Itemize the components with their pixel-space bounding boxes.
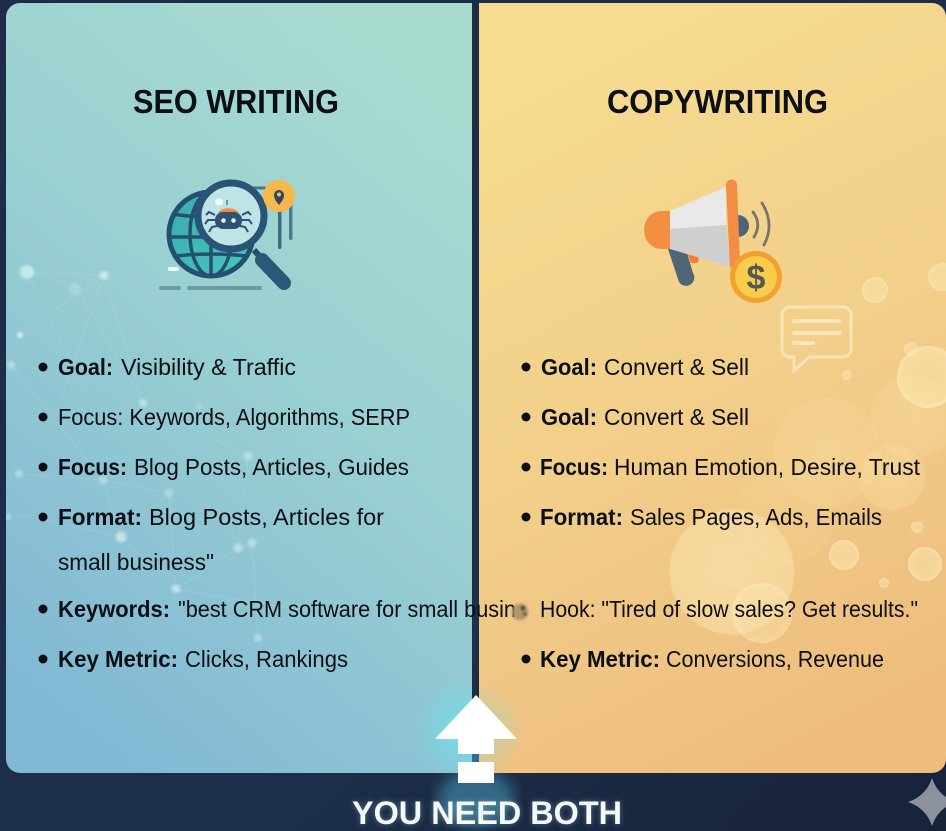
panel: SEO writing bbox=[5, 3, 472, 773]
list: copywriting points bbox=[522, 354, 920, 672]
list: SEO writing points bbox=[38, 354, 516, 672]
list: copywriting points: Goal: bbox=[541, 354, 597, 380]
list: SEO writing points: Format: bbox=[58, 504, 142, 530]
smudge artifact over text bbox=[512, 604, 528, 620]
icon: megaphone with dollar coin bbox=[644, 180, 782, 303]
list: SEO writing points: Goal: bbox=[58, 354, 113, 380]
list: SEO writing points: small business" bbox=[58, 549, 214, 575]
list: copywriting points: Conversions, Revenue bbox=[666, 646, 884, 672]
icon: globe with magnifying glass and spider bbox=[159, 180, 295, 290]
list: copywriting points: Goal: bbox=[541, 404, 597, 430]
bokeh bubbles bbox=[669, 263, 946, 643]
network decoration bbox=[6, 264, 262, 643]
list: SEO writing points: Focus: bbox=[58, 454, 127, 480]
title: you need both: YOU NEED BOTH bbox=[352, 795, 622, 831]
list: SEO writing points: Blog Posts, Articles for bbox=[149, 504, 384, 530]
list: SEO writing points: Clicks, Rankings bbox=[185, 646, 348, 672]
list: copywriting points: Convert & Sell bbox=[604, 354, 749, 380]
list: copywriting points: Key Metric: bbox=[540, 646, 660, 672]
list: SEO writing points: Key Metric: bbox=[58, 646, 178, 672]
list: SEO writing points: Visibility & Traffic bbox=[121, 354, 296, 380]
list: SEO writing points: Focus: Keywords, Algorithms, SERP bbox=[58, 404, 410, 430]
icon: megaphone with dollar coin: $ bbox=[747, 259, 766, 297]
list: copywriting points: Format: bbox=[540, 504, 623, 530]
list: copywriting points: Hook: "Tired of slow sales? Get results." bbox=[540, 596, 918, 622]
glow under the arrow bbox=[438, 770, 514, 826]
list: SEO writing points: Blog Posts, Articles, Guides bbox=[134, 454, 409, 480]
icon: chat bubble outline bbox=[782, 307, 851, 371]
heading: copywriting: COPYWRITING bbox=[607, 83, 828, 120]
icon: sparkle star bbox=[908, 778, 946, 826]
list: copywriting points: Focus: bbox=[540, 454, 608, 480]
panel: copywriting bbox=[479, 3, 946, 773]
list: SEO writing points: "best CRM software for small busin bbox=[178, 596, 516, 622]
list: copywriting points: Sales Pages, Ads, Emails bbox=[630, 504, 882, 530]
title: you need both: YOU NEED BOTH bbox=[352, 795, 622, 831]
list: copywriting points: Convert & Sell bbox=[604, 404, 749, 430]
arrow: glowing up arrow bbox=[427, 690, 518, 783]
list: copywriting points: Human Emotion, Desire, Trust bbox=[614, 454, 920, 480]
heading: SEO writing: SEO WRITING bbox=[133, 83, 339, 120]
list: SEO writing points: Keywords: bbox=[58, 596, 170, 622]
